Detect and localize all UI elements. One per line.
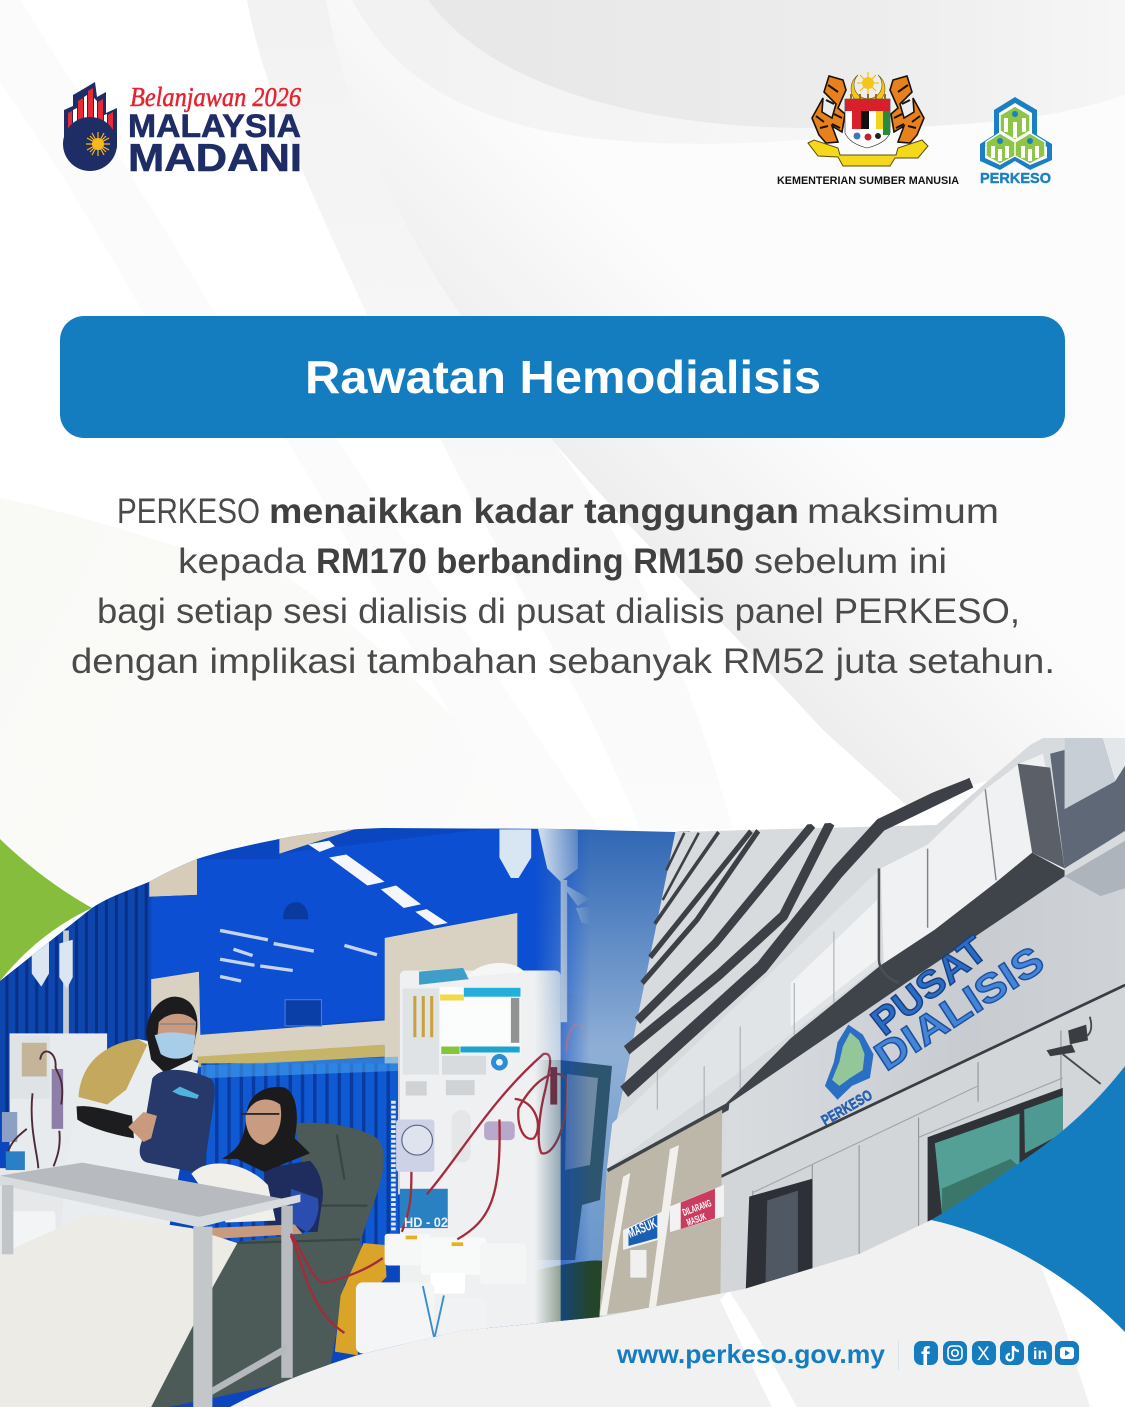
social icon: youtube xyxy=(1055,1341,1079,1365)
logo: PERKESO xyxy=(980,97,1052,187)
body paragraph: PERKESO xyxy=(117,492,260,531)
title: Rawatan Hemodialisis xyxy=(305,351,821,403)
facade band xyxy=(607,868,881,1169)
body paragraph xyxy=(71,492,1055,681)
photo: dialysis ward xyxy=(0,820,600,1407)
social icon: tiktok xyxy=(1000,1341,1024,1365)
logo text: Malaysia: MALAYSIA xyxy=(128,108,301,144)
lower wall xyxy=(722,1222,928,1294)
blue corner wave xyxy=(931,1066,1125,1332)
social icon: X xyxy=(972,1341,996,1365)
soffit xyxy=(607,853,1065,1175)
recliner chair xyxy=(151,1123,384,1407)
social icon: facebook: f xyxy=(921,1341,930,1371)
icon: scroll xyxy=(808,140,928,166)
body paragraph: kepada xyxy=(178,542,307,581)
body paragraph: dengan implikasi tambahan sebanyak RM52 juta setahun. xyxy=(71,642,1055,681)
sign text: PERKESO: PERKESO xyxy=(818,1087,876,1129)
nurse xyxy=(76,996,199,1225)
social icon: linkedin xyxy=(1028,1341,1052,1365)
icon: right tiger xyxy=(890,76,924,143)
stainless table xyxy=(0,1163,300,1407)
body paragraph: bagi setiap sesi dialisis di pusat dialisis panel PERKESO, xyxy=(97,592,1020,631)
garage entrance xyxy=(600,1110,722,1315)
sign text: Masuk parking: MASUK xyxy=(625,1215,659,1241)
icon: left tiger xyxy=(812,76,846,143)
navy bag xyxy=(140,1070,215,1171)
logo text: Belanjawan 2026: Belanjawan 2026 xyxy=(130,82,301,112)
ministry name: KEMENTERIAN SUMBER MANUSIA xyxy=(777,175,959,187)
logo wordmark: PERKESO xyxy=(980,170,1051,187)
patient xyxy=(191,1087,323,1239)
body paragraph: maksimum xyxy=(807,492,999,531)
sign text: Dilarang: DILARANG xyxy=(681,1198,713,1219)
social icon: instagram xyxy=(943,1341,967,1365)
green corner leaf xyxy=(0,839,92,981)
window xyxy=(928,1088,1063,1224)
logo: Jata Negara coat of arms xyxy=(777,72,959,187)
photo: dialysis centre building xyxy=(598,734,1125,1350)
IV bags and poles xyxy=(32,828,588,1034)
machine sign label: HD - 02 xyxy=(404,1214,448,1230)
dialysis machine xyxy=(291,963,587,1354)
footer xyxy=(616,1339,1079,1371)
logo: Belanjawan 2026 Malaysia Madani xyxy=(63,82,302,180)
photo collage xyxy=(0,734,1125,1407)
title banner xyxy=(60,316,1065,438)
photo: sky and distant buildings xyxy=(530,825,690,1330)
social icon: facebook xyxy=(914,1341,938,1371)
bottom grey wave xyxy=(200,1215,1090,1407)
icon: hand of buildings xyxy=(63,82,117,171)
patterned bag xyxy=(335,1243,387,1355)
icon: three hexagons xyxy=(980,97,1052,170)
white blanket xyxy=(0,1213,237,1407)
body paragraph: sebelum ini xyxy=(754,542,947,581)
website: www.perkeso.gov.my xyxy=(616,1339,886,1369)
social icon: X: X xyxy=(977,1344,990,1365)
door xyxy=(746,1179,812,1293)
body paragraph: menaikkan kadar tanggungan xyxy=(269,492,799,531)
overhang box xyxy=(881,754,1065,983)
sign text: DIALISIS: DIALISIS xyxy=(867,938,1052,1080)
cctv camera xyxy=(1047,1025,1088,1056)
upper facade stripes xyxy=(624,781,971,1092)
body paragraph: RM170 berbanding RM150 xyxy=(316,542,744,581)
machine sign xyxy=(400,1189,448,1228)
floor behind table xyxy=(0,1168,64,1254)
sign logo xyxy=(825,1025,874,1100)
left machine xyxy=(2,1033,107,1252)
social icon: linkedin: in xyxy=(1033,1346,1047,1363)
sign text: Dilarang Masuk second line: MASUK xyxy=(685,1211,708,1229)
logo text: Madani: MADANI xyxy=(128,137,302,180)
sign text: PUSAT: PUSAT xyxy=(864,928,995,1044)
sign wall xyxy=(728,876,1125,1114)
icon: shield xyxy=(845,94,890,148)
icon: crescent and star xyxy=(851,72,885,106)
